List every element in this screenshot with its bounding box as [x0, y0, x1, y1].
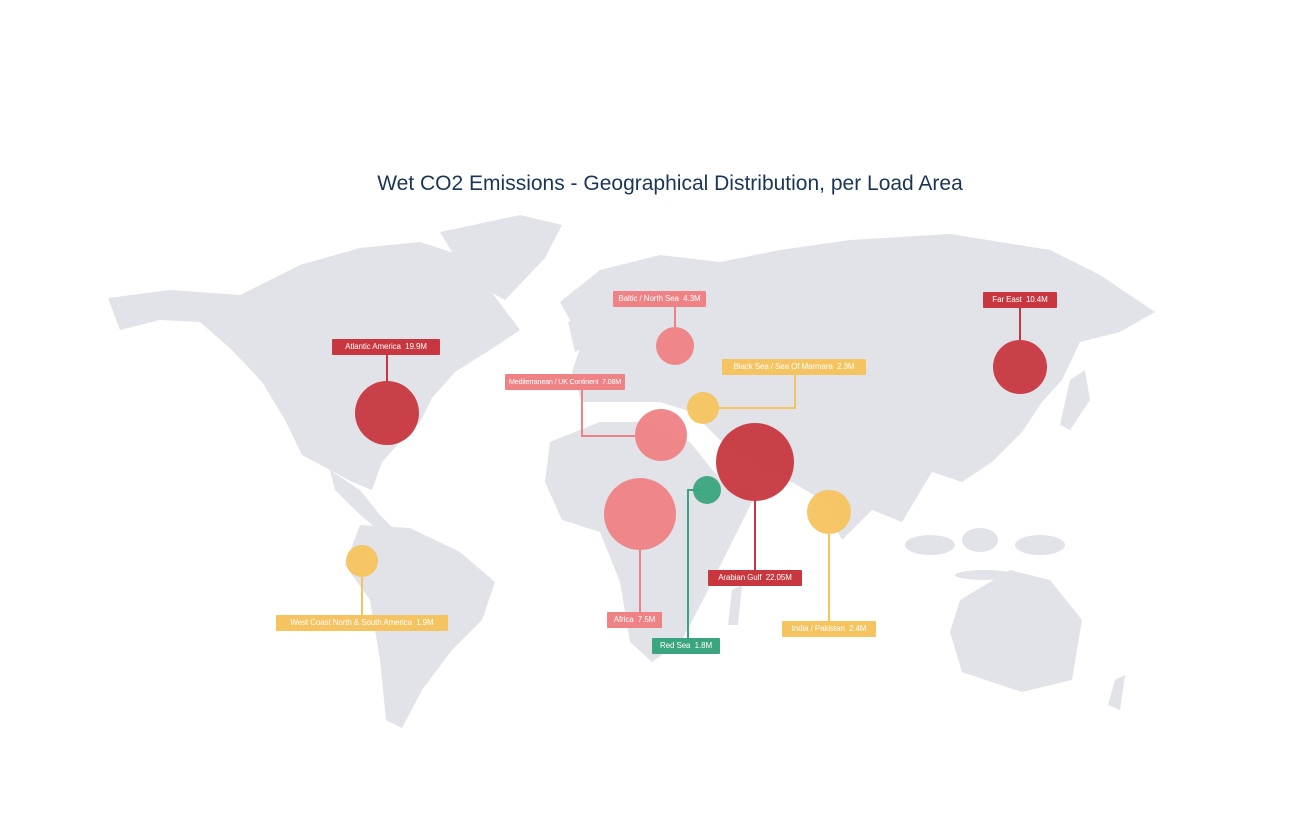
central america: [330, 470, 395, 532]
label: west coast: [276, 615, 448, 631]
africa: [545, 422, 762, 662]
south america: [345, 525, 495, 728]
label: mediterranean: Mediterranean / UK Continent 7.08M: [509, 377, 621, 386]
title: Wet CO2 Emissions - Geographical Distribution, per Load Area: [377, 172, 963, 195]
label: red sea: Red Sea 1.8M: [660, 641, 712, 650]
uk: [568, 315, 590, 352]
madagascar: [728, 585, 742, 625]
label: atlantic america: [332, 339, 440, 355]
greenland: [440, 215, 562, 300]
label: mediterranean: [505, 374, 625, 390]
label: arabian gulf: [708, 570, 802, 586]
label: india: India / Pakistan 2.4M: [792, 624, 866, 633]
label: africa: Africa 7.5M: [614, 615, 655, 624]
label: red sea: [652, 638, 720, 654]
label: atlantic america: Atlantic America 19.9M: [345, 342, 427, 351]
nz: [1108, 675, 1125, 710]
label: arabian gulf: Arabian Gulf 22.05M: [718, 573, 792, 582]
label: baltic: [613, 291, 706, 307]
label: west coast: West Coast North & South America 1.9M: [290, 618, 434, 627]
eurasia: [560, 234, 1155, 540]
indonesia: [905, 535, 955, 555]
australia: [950, 570, 1082, 692]
label: black sea: Black Sea / Sea Of Marmara 2.3M: [734, 362, 854, 371]
label: baltic: Baltic / North Sea 4.3M: [618, 294, 701, 303]
north america: [108, 242, 520, 490]
connector lines: [362, 307, 1020, 638]
label: india: [782, 621, 876, 637]
label: far east: Far East 10.4M: [992, 295, 1048, 304]
japan: [1060, 370, 1090, 430]
label: africa: [607, 612, 662, 628]
label: far east: [983, 292, 1057, 308]
bubbles: [346, 327, 1047, 577]
label: black sea: [722, 359, 866, 375]
